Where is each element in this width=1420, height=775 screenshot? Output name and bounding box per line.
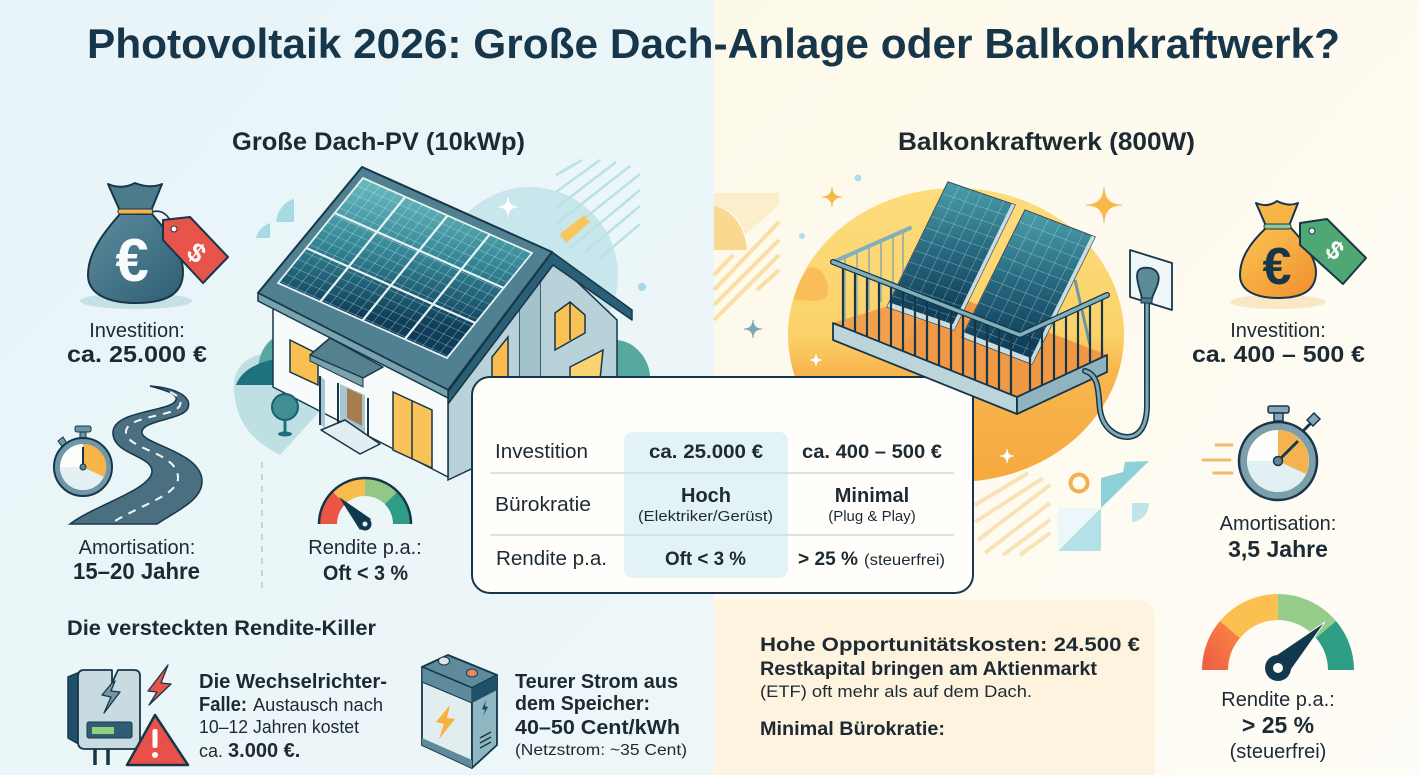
row: return — [496, 548, 945, 570]
icon: stopwatch left — [54, 426, 112, 496]
opportunity text: Minimal Bürokratie: — [760, 719, 945, 740]
text: payback balcony: Amortisation: — [1220, 513, 1336, 535]
text: investment roof — [67, 320, 207, 367]
opportunity text: (ETF) oft mehr als auf dem Dach. — [760, 682, 1032, 701]
text: inverter trap: ca. 3.000 €. — [199, 740, 300, 762]
icon: wall socket and plug — [1130, 250, 1172, 310]
row: return: > 25 % — [798, 549, 858, 570]
text: storage electricity: (Netzstrom: ~35 Cent) — [515, 742, 687, 759]
row: bureaucracy: (Plug & Play) — [828, 508, 916, 525]
main roof — [258, 167, 552, 390]
balcony base — [833, 323, 1017, 414]
text: investment balcony: Investition: — [1230, 320, 1326, 342]
text: payback balcony: 3,5 Jahre — [1228, 536, 1328, 562]
heading: roof PV: Große Dach-PV (10kWp) — [232, 128, 525, 156]
text: return roof: Rendite p.a.: — [308, 537, 422, 559]
dashed divider — [261, 462, 263, 592]
house illustration — [234, 160, 650, 480]
text: return balcony — [1221, 689, 1335, 763]
row: bureaucracy: Bürokratie — [495, 494, 591, 516]
text: return roof: Oft < 3 % — [323, 562, 408, 585]
icon: blue money bag with price tag: € — [115, 227, 149, 294]
background: left half — [0, 0, 714, 775]
side windows — [492, 302, 603, 380]
text: investment balcony: ca. 400 – 500 € — [1192, 341, 1365, 367]
text: investment roof: ca. 25.000 € — [67, 341, 207, 367]
text: return balcony: > 25 % — [1242, 712, 1314, 738]
back rail and floor — [833, 228, 1107, 397]
icon: gauge left — [319, 478, 411, 530]
text: payback roof: 15–20 Jahre — [73, 558, 200, 584]
text: inverter trap: 10–12 Jahren kostet — [199, 717, 359, 737]
text: investment balcony — [1192, 320, 1365, 367]
roof solar panels — [278, 178, 532, 358]
sparkle and dot left — [498, 197, 646, 291]
text: storage electricity: Teurer Strom aus — [515, 671, 678, 693]
panel: comparison table — [472, 377, 973, 593]
row: investment: Investition — [495, 441, 588, 463]
balcony with solar panels — [833, 182, 1107, 414]
panel: opportunity costs — [715, 600, 1155, 775]
row: investment: ca. 25.000 € — [649, 442, 763, 463]
text: payback roof — [73, 537, 200, 584]
icon: blue money bag with price tag: $ — [181, 236, 212, 269]
opportunity text — [760, 635, 1140, 740]
title: Photovoltaik 2026: Große Dach-Anlage oder Balkonkraftwerk? — [87, 20, 1340, 67]
text: return balcony: Rendite p.a.: — [1221, 689, 1335, 711]
house backdrop shapes — [234, 160, 650, 455]
power cable — [1085, 300, 1147, 437]
background: right half — [714, 0, 1420, 775]
row: return: Rendite p.a. — [496, 548, 607, 570]
icon: inverter with warning — [68, 665, 188, 765]
row: investment — [495, 441, 942, 463]
row: return: (steuerfrei) — [864, 552, 945, 569]
text: inverter trap: Die Wechselrichter- — [199, 671, 387, 693]
text: investment roof: Investition: — [89, 320, 185, 342]
large window — [393, 392, 432, 468]
row: bureaucracy — [495, 485, 916, 525]
balcony panel left — [887, 182, 1015, 330]
decor: stripes, ring, triangles lower right — [975, 461, 1149, 555]
text: storage electricity — [515, 671, 687, 759]
icon: stopwatch right — [1203, 406, 1320, 500]
row: bureaucracy: Hoch — [681, 485, 731, 507]
tree — [272, 394, 298, 436]
icon: winding road — [70, 386, 202, 524]
balusters — [843, 266, 1102, 395]
text: return balcony: (steuerfrei) — [1230, 741, 1326, 763]
row: return: Oft < 3 % — [665, 549, 746, 570]
text: inverter trap — [199, 671, 387, 762]
heading: hidden return killers: Die versteckten Rendite-Killer — [67, 617, 376, 640]
opportunity text: Hohe Opportunitätskosten: 24.500 € — [760, 635, 1140, 656]
text: payback roof: Amortisation: — [79, 537, 195, 559]
icon: orange money bag with price tag — [1230, 201, 1366, 309]
cable highlight — [1085, 300, 1147, 437]
handrails — [833, 262, 1107, 335]
icon: blue money bag with price tag — [80, 183, 228, 309]
decor: yellow shapes left — [714, 193, 779, 320]
text: return roof — [308, 537, 422, 585]
text: inverter trap: Austausch nach — [253, 695, 383, 715]
text: storage electricity: dem Speicher: — [515, 693, 650, 715]
text: payback balcony — [1220, 513, 1336, 562]
opportunity text: Restkapital bringen am Aktienmarkt — [760, 659, 1098, 680]
porch — [310, 338, 383, 454]
front window — [290, 340, 318, 385]
icon: battery — [422, 655, 497, 768]
row: bureaucracy: Minimal — [835, 485, 909, 507]
gable roof strip — [448, 252, 632, 404]
balcony panel right — [962, 210, 1095, 364]
decor: sparkles and dots right — [744, 174, 1122, 463]
icon: orange money bag with price tag: € — [1263, 238, 1291, 296]
balcony backdrop: sun disc — [788, 188, 1124, 482]
gable side wall — [448, 258, 617, 480]
icon: gauge right — [1202, 594, 1354, 681]
text: inverter trap: Falle: — [199, 694, 247, 716]
row: bureaucracy: (Elektriker/Gerüst) — [638, 508, 773, 525]
icon: orange money bag with price tag: $ — [1320, 234, 1351, 266]
row: investment: ca. 400 – 500 € — [802, 442, 942, 463]
front wall — [273, 308, 448, 477]
heading: balcony PV: Balkonkraftwerk (800W) — [898, 128, 1195, 156]
text: storage electricity: 40–50 Cent/kWh — [515, 717, 680, 739]
